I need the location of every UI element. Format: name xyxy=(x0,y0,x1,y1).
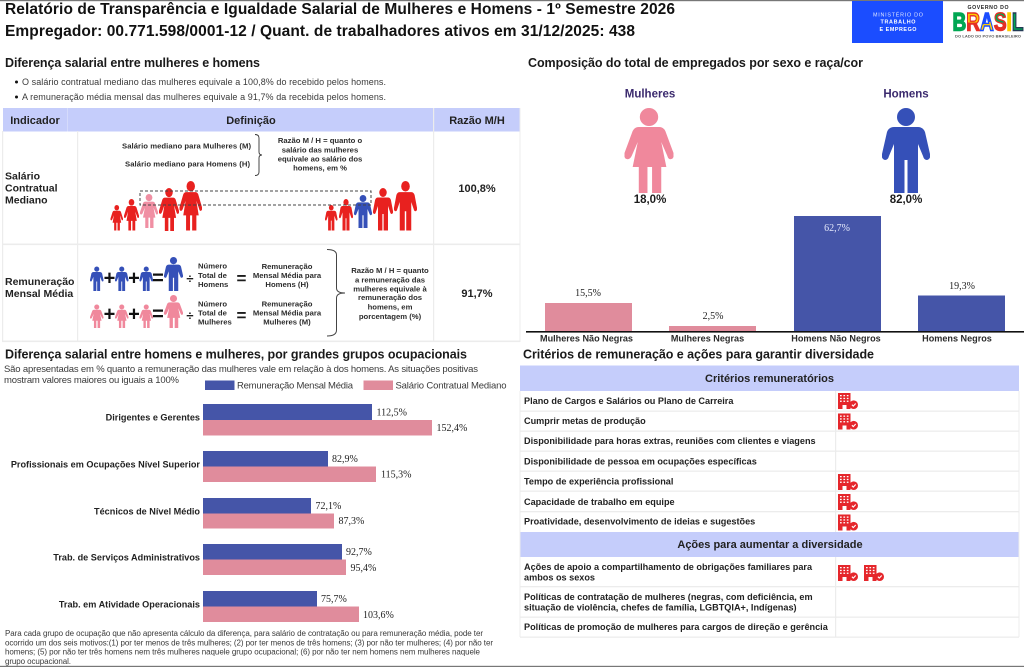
bar chart: sexo e raça/cor xyxy=(526,216,1024,344)
table header: Razão M/H xyxy=(449,115,505,127)
chave e razão M/H: homens, em xyxy=(368,302,413,312)
fórmula: mulheres xyxy=(90,295,322,328)
linha: ocupações específicas: Disponibilidade de pessoa em ocupações específicas xyxy=(524,456,757,466)
grupo: profissionais: Profissionais em Ocupações Nível Superior xyxy=(11,460,200,470)
grupo: atividade operacional: Trab. em Atividade Operacionais xyxy=(59,600,200,610)
fórmula: homens: Homens xyxy=(198,280,228,289)
fórmula: homens: Mensal Média para xyxy=(253,271,322,280)
grupo: dirigentes e gerentes: Dirigentes e Gerentes xyxy=(106,412,200,422)
heading: critérios: Critérios de remuneração e ações para garantir diversidade xyxy=(523,348,874,362)
definição: salário mediano: Salário mediano para Homens (H) xyxy=(125,160,250,168)
fórmula: mulheres: + xyxy=(104,304,115,326)
linha: plano de cargos xyxy=(524,393,858,409)
fórmula: mulheres: Número xyxy=(198,300,227,308)
linha: experiência xyxy=(524,474,858,490)
grupo: técnicos xyxy=(94,498,364,528)
row label: remuneração mensal média: Remuneração xyxy=(5,276,74,288)
icon: homens 82,0%: 82,0% xyxy=(890,194,922,206)
value: 100,8%: 100,8% xyxy=(458,183,496,195)
nota de rodapé: homens; (5) por não ter três homens nem três mulheres naquele grupo ocupacional; (6) por não ter nem homens nem mulheres naquele xyxy=(5,648,481,656)
linha: obrigações familiares: Ações de apoio a compartilhamento de obrigações familiares para xyxy=(524,562,813,572)
row label: remuneração mensal média: Mensal Média xyxy=(5,288,73,300)
table header: Indicador xyxy=(10,115,60,127)
table header xyxy=(10,115,505,127)
bar chart: sexo e raça/cor: Homens Não Negros xyxy=(791,334,881,344)
bullet list: A remuneração média mensal das mulheres equivale a 91,7% da recebida pelos homens. xyxy=(22,92,386,102)
fórmula: mulheres: Mensal Média para xyxy=(253,308,322,318)
linha: plano de cargos: Plano de Cargos e Salários ou Plano de Carreira xyxy=(524,396,734,406)
linha: contratação: Políticas de contratação de mulheres (negras, com deficiência, em xyxy=(524,592,813,602)
linha: contratação xyxy=(524,592,813,612)
definição: salário mediano: homens, em % xyxy=(293,164,347,172)
heading: diferença salarial: Diferença salarial entre mulheres e homens xyxy=(5,56,260,70)
fórmula: homens: = xyxy=(237,269,247,288)
panel: critérios e ações xyxy=(520,366,1020,638)
logo: Ministério do Trabalho e Emprego: TRABALHO xyxy=(880,20,916,26)
linha: proatividade xyxy=(524,514,858,530)
subtítulo: critérios remuneratórios: Critérios remuneratórios xyxy=(705,373,834,385)
linha: proatividade: Proatividade, desenvolvimento de ideias e sugestões xyxy=(524,516,755,526)
fórmula: homens: Número xyxy=(198,262,227,270)
definição: salário mediano xyxy=(122,134,362,176)
chave e razão M/H: remuneração dos xyxy=(358,293,422,302)
grupo: técnicos: 72,1% xyxy=(316,501,341,512)
fórmula: mulheres: ÷ xyxy=(186,308,194,323)
grupo: profissionais: 82,9% xyxy=(332,454,358,465)
icon: homens 82,0%: Homens xyxy=(883,88,929,100)
bar chart: sexo e raça/cor: Mulheres Negras xyxy=(671,334,744,344)
linha: promoção: Políticas de promoção de mulheres para cargos de direção e gerência xyxy=(524,622,829,632)
grupo: serviços administrativos xyxy=(53,544,376,575)
bar chart: sexo e raça/cor: 2,5% xyxy=(703,311,723,322)
definição: salário mediano: salário das mulheres xyxy=(282,146,358,154)
table header: Definição xyxy=(226,115,276,127)
definição: salário mediano: Razão M / H = quanto o xyxy=(278,136,362,145)
fórmula: mulheres: Total de xyxy=(198,308,228,318)
grupo: serviços administrativos: 92,7% xyxy=(346,547,372,558)
definição: salário mediano: equivale ao salário dos xyxy=(278,154,362,164)
nota de rodapé: Para cada grupo de ocupação que não apresenta cálculo da diferença, para salário de contratação ou para remuneração média, pode ter xyxy=(5,629,483,638)
descrição do gráfico: São apresentadas em % quanto a remuneração das mulheres vale em relação à dos homens. As situações positivas xyxy=(4,364,478,375)
heading: grupos ocupacionais: Diferença salarial entre homens e mulheres, por grandes grupos ocupacionais xyxy=(5,348,467,362)
bullet list xyxy=(15,77,386,102)
fórmula: mulheres: = xyxy=(152,304,164,326)
bar chart: grupos ocupacionais xyxy=(11,404,467,622)
linha: metas de produção: Cumprir metas de produção xyxy=(524,416,646,426)
chave e razão M/H: a remuneração das xyxy=(355,276,425,284)
bar chart: sexo e raça/cor: 15,5% xyxy=(575,288,601,299)
legenda xyxy=(205,380,506,392)
fórmula: homens xyxy=(90,257,322,291)
grupo: profissionais xyxy=(11,451,411,482)
icon: mulheres 18,0%: 18,0% xyxy=(634,194,666,206)
linha: metas de produção xyxy=(524,414,858,430)
grupo: serviços administrativos: Trab. de Serviços Administrativos xyxy=(53,552,200,562)
linha: horas extras: Disponibilidade para horas extras, reuniões com clientes e viagens xyxy=(524,436,816,446)
logo: Governo do Brasil: GOVERNO DO xyxy=(968,5,1008,11)
fórmula: homens: = xyxy=(152,268,164,290)
row label: salário contratual mediano xyxy=(5,170,58,206)
chave e razão M/H xyxy=(327,250,429,336)
fórmula: mulheres: Mulheres (M) xyxy=(263,318,311,326)
chave e razão M/H: Razão M / H = quanto xyxy=(351,266,429,275)
bar chart: sexo e raça/cor: Homens Negros xyxy=(922,334,992,344)
icon: mulheres 18,0% xyxy=(624,88,675,206)
row label: remuneração mensal média xyxy=(5,276,74,300)
grupo: atividade operacional: 103,6% xyxy=(363,610,394,621)
bar chart: sexo e raça/cor: 62,7% xyxy=(824,223,850,234)
icon: homens 82,0% xyxy=(882,88,930,206)
row label: salário contratual mediano: Mediano xyxy=(5,194,48,206)
fórmula: homens: + xyxy=(128,268,140,290)
grupo: dirigentes e gerentes xyxy=(106,404,467,436)
legenda: Salário Contratual Mediano xyxy=(396,380,506,392)
fórmula: mulheres: Remuneração xyxy=(262,300,313,308)
fórmula: homens: Remuneração xyxy=(262,262,313,271)
chave e razão M/H: mulheres equivale à xyxy=(353,284,427,294)
panel: tabela indicadores xyxy=(2,108,520,342)
logo: Ministério do Trabalho e Emprego: MINISTÉRIO DO xyxy=(873,12,923,18)
grupo: dirigentes e gerentes: 152,4% xyxy=(436,423,467,434)
row label: salário contratual mediano: Salário xyxy=(5,170,40,182)
nota de rodapé: grupo ocupacional. xyxy=(5,657,71,666)
title: Empregador: 00.771.598/0001-12 / Quant. de trabalhadores ativos em 31/12/2025: 438 xyxy=(5,23,635,40)
grupo: atividade operacional: 75,7% xyxy=(321,594,347,605)
icon: mulheres 18,0%: Mulheres xyxy=(625,88,675,100)
heading: composição: Composição do total de empregados por sexo e raça/cor xyxy=(528,56,863,70)
nota de rodapé xyxy=(5,629,493,666)
linha: experiência: Tempo de experiência profissional xyxy=(524,476,673,486)
title: Relatório de Transparência e Igualdade Salarial de Mulheres e Homens - 1º Semestre 2026 xyxy=(5,1,675,18)
legenda: Remuneração Mensal Média xyxy=(237,380,354,392)
grupo: profissionais: 115,3% xyxy=(381,470,411,480)
linha: trabalho em equipe xyxy=(524,494,858,510)
fórmula: mulheres: Mulheres xyxy=(198,318,232,326)
logo: Ministério do Trabalho e Emprego xyxy=(852,1,943,43)
fórmula: homens: Total de xyxy=(198,271,228,280)
grupo: serviços administrativos: 95,4% xyxy=(350,563,376,574)
pictograma: homens por salário xyxy=(325,181,417,230)
grupo: técnicos: 87,3% xyxy=(338,516,364,527)
bar chart: sexo e raça/cor: Mulheres Não Negras xyxy=(540,334,633,344)
descrição do gráfico: mostram valores maiores ou iguais a 100% xyxy=(4,375,180,386)
title xyxy=(5,1,675,40)
logo: Ministério do Trabalho e Emprego: E EMPREGO xyxy=(880,27,916,33)
bar chart: sexo e raça/cor: 19,3% xyxy=(949,281,975,292)
row label: salário contratual mediano: Contratual xyxy=(5,182,58,194)
fórmula: mulheres: = xyxy=(237,306,247,325)
fórmula: homens: ÷ xyxy=(186,271,194,286)
nota de rodapé: ocorrido um dos seis motivos:(1) por ter menos de três mulheres; (2) por ter menos de três homens; (3) por não ter mulheres; (4) por não ter xyxy=(5,638,493,648)
logo: Governo do Brasil: DO LADO DO POVO BRASILEIRO xyxy=(955,34,1021,38)
subtítulo: ações: Ações para aumentar a diversidade xyxy=(677,539,863,551)
value: 91,7%: 91,7% xyxy=(461,288,493,300)
bullet list: O salário contratual mediano das mulheres equivale a 100,8% do recebido pelos homens. xyxy=(22,77,386,87)
grupo: dirigentes e gerentes: 112,5% xyxy=(376,408,407,418)
grupo: atividade operacional xyxy=(59,591,394,622)
linha: obrigações familiares: ambos os sexos xyxy=(524,572,595,582)
chave e razão M/H: porcentagem (%) xyxy=(359,312,422,321)
descrição do gráfico xyxy=(4,364,478,386)
pictograma: mulheres por salário xyxy=(110,181,202,231)
fórmula: homens: + xyxy=(104,268,115,290)
linha: obrigações familiares xyxy=(524,562,884,582)
fórmula: mulheres: + xyxy=(128,304,140,326)
linha: contratação: situação de violência, chefes de família, LGBTQIA+, Indígenas) xyxy=(524,602,797,612)
definição: salário mediano: Salário mediano para Mulheres (M) xyxy=(122,142,251,150)
fórmula: homens: Homens (H) xyxy=(265,280,309,289)
linha: trabalho em equipe: Capacidade de trabalho em equipe xyxy=(524,497,675,507)
grupo: técnicos: Técnicos de Nível Médio xyxy=(94,506,200,516)
